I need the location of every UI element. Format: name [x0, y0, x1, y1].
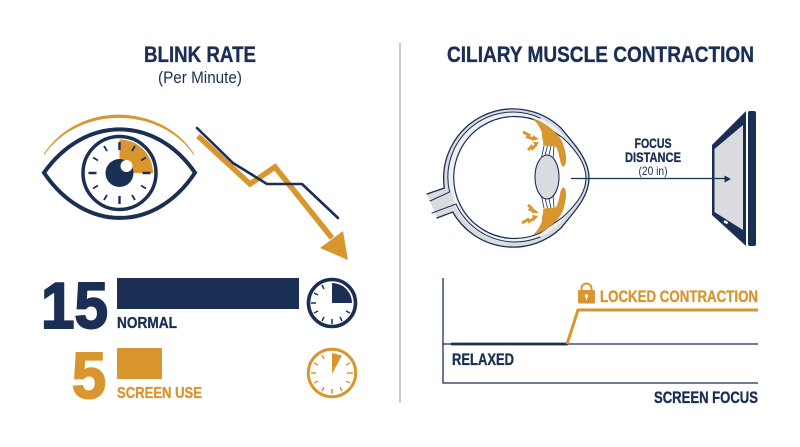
heading: blink rate: BLINK RATE — [144, 42, 256, 67]
label: screen use: SCREEN USE — [117, 385, 202, 402]
bar: normal — [117, 278, 299, 309]
heading: ciliary muscle contraction: CILIARY MUSCLE CONTRACTION — [447, 42, 754, 67]
subheading: per minute: (Per Minute) — [158, 69, 242, 87]
arrow: falling orange trend — [198, 136, 348, 260]
arrow: focus distance — [571, 176, 731, 182]
ciliary muscle: top — [533, 119, 566, 167]
ciliary muscle: bottom — [533, 187, 566, 235]
label: focus distance: DISTANCE — [625, 149, 681, 165]
panel: blink rate — [41, 42, 356, 412]
lens — [535, 155, 559, 199]
bar: screen use — [117, 348, 162, 379]
arrows: contraction — [522, 132, 536, 223]
icon: eye with clock iris — [44, 115, 195, 218]
label: locked contraction: LOCKED CONTRACTION — [600, 288, 758, 306]
icon: lock — [578, 284, 595, 304]
label: normal: NORMAL — [117, 315, 177, 332]
label: screen focus: SCREEN FOCUS — [654, 389, 758, 407]
panel: ciliary muscle contraction — [427, 42, 758, 407]
icon: orange clock — [308, 349, 356, 397]
label: focus distance — [625, 135, 681, 178]
chart: contraction over screen focus — [443, 278, 758, 407]
line: locked contraction — [567, 310, 758, 344]
icon: tablet — [712, 111, 756, 246]
label: focus distance: (20 in) — [638, 164, 668, 178]
number: 5: 5 — [72, 339, 106, 412]
label: focus distance: FOCUS — [634, 135, 672, 151]
label: relaxed: RELAXED — [452, 351, 514, 369]
line: relaxed — [452, 343, 567, 345]
number: 15: 15 — [41, 269, 108, 342]
diagram: eye cross-section — [427, 108, 589, 248]
icon: navy clock — [308, 280, 356, 326]
line: navy blink trend — [197, 128, 338, 218]
